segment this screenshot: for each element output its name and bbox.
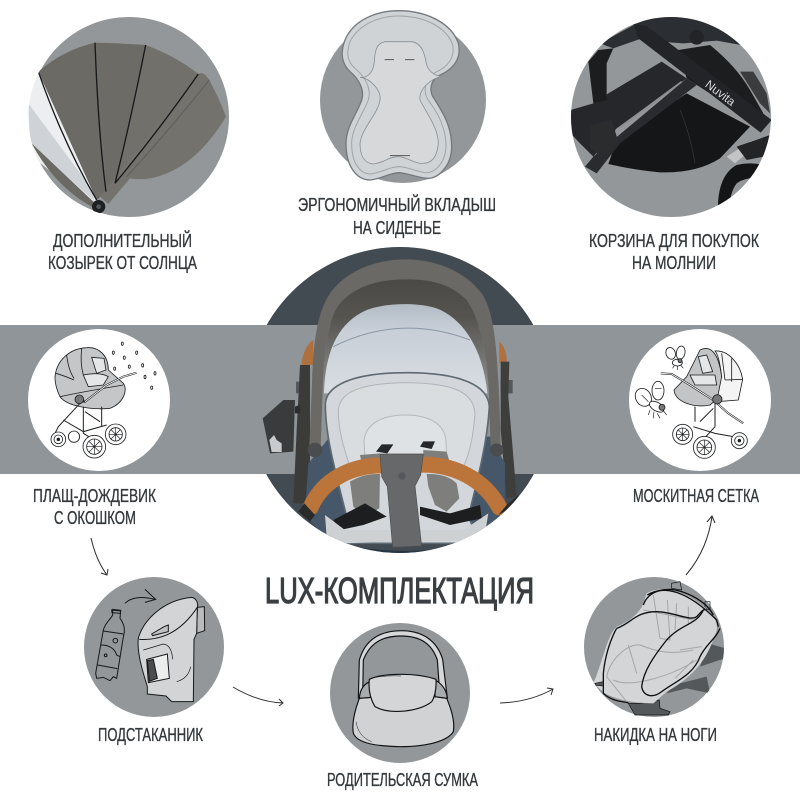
heading: raincoat label: ПЛАЩ-ДОЖДЕВИК bbox=[33, 486, 156, 506]
image: canopy with visor bbox=[20, 43, 226, 213]
central dark circle bbox=[247, 247, 553, 553]
panel: foot cover bbox=[584, 577, 725, 717]
heading: parents bag label: РОДИТЕЛЬСКАЯ СУМКА bbox=[327, 770, 478, 790]
circle: basket background bbox=[571, 17, 771, 217]
icon: transparent foot cover bbox=[593, 582, 725, 715]
harness buckles bbox=[333, 503, 482, 530]
seat liner bbox=[325, 373, 489, 543]
canopy rim bbox=[309, 259, 501, 447]
rim joints bbox=[308, 443, 322, 457]
seat sides bbox=[305, 437, 505, 537]
heading: foot cover label: НАКИДКА НА НОГИ bbox=[594, 725, 717, 745]
arrow: cup holder to bag bbox=[233, 687, 283, 706]
panel: ergonomic seat insert bbox=[320, 11, 486, 183]
circle: mosquito net white background bbox=[629, 329, 771, 471]
heading: basket label bbox=[589, 231, 759, 273]
heading: raincoat label bbox=[33, 486, 156, 528]
big mosquito bbox=[632, 385, 655, 409]
panel: raincoat with window bbox=[28, 329, 170, 471]
panel: zip shopping basket bbox=[571, 15, 777, 220]
image: seat insert bbox=[342, 11, 459, 180]
arrow: raincoat to cup holder bbox=[91, 538, 108, 575]
image: stroller front view bbox=[263, 259, 518, 555]
arrow: foot cover to mosquito net bbox=[686, 516, 715, 575]
panel: mosquito net bbox=[629, 329, 771, 471]
icon: bottle and cup holder bbox=[96, 589, 205, 702]
arrow: bag to foot cover bbox=[500, 688, 553, 703]
image: basket and frame bbox=[571, 17, 771, 206]
cup holder bbox=[263, 400, 295, 453]
heading: seat insert label bbox=[298, 194, 496, 238]
heading: basket label: НА МОЛНИИ bbox=[632, 253, 716, 273]
heading: seat insert label: НА СИДЕНЬЕ bbox=[353, 218, 441, 238]
circle: cup holder background bbox=[84, 577, 224, 717]
heading: extra sun visor label: ДОПОЛНИТЕЛЬНЫЙ bbox=[53, 230, 192, 251]
circle: foot cover background bbox=[584, 577, 724, 717]
small mosquito bbox=[664, 346, 677, 361]
panel: cup holder bbox=[84, 577, 224, 717]
heading: extra sun visor label bbox=[48, 230, 197, 273]
panel: extra sun visor bbox=[20, 17, 229, 217]
lower cushion bbox=[325, 513, 488, 543]
hood lining bbox=[323, 279, 489, 407]
frame and tan tubes bbox=[302, 340, 507, 365]
heading: LUX package title: LUX-КОМПЛЕКТАЦИЯ bbox=[265, 570, 534, 611]
circle: insert background bbox=[320, 17, 486, 183]
panel: parents bag bbox=[330, 623, 470, 763]
image: basket and frame: Nuvita bbox=[703, 77, 738, 109]
icon: parents bag bbox=[353, 631, 454, 747]
crotch strap bbox=[380, 454, 423, 547]
icon: stroller with rain cover and drops bbox=[51, 342, 156, 458]
heading: seat insert label: ЭРГОНОМИЧНЫЙ ВКЛАДЫШ bbox=[298, 194, 496, 215]
heading: raincoat label: С ОКОШКОМ bbox=[54, 508, 136, 528]
headrest bbox=[364, 415, 447, 458]
harness pads bbox=[350, 474, 380, 510]
circle: bag background bbox=[330, 623, 470, 763]
icon: stroller with net and mosquitoes bbox=[632, 345, 747, 458]
heading: extra sun visor label: КОЗЫРЕК ОТ СОЛНЦА bbox=[48, 253, 197, 273]
grey horizontal band bbox=[0, 325, 800, 474]
circle: raincoat white background bbox=[28, 329, 170, 471]
circle: visor background bbox=[29, 17, 229, 217]
heading: cup holder label: ПОДСТАКАННИК bbox=[98, 725, 203, 745]
leather handlebar bbox=[311, 465, 499, 507]
